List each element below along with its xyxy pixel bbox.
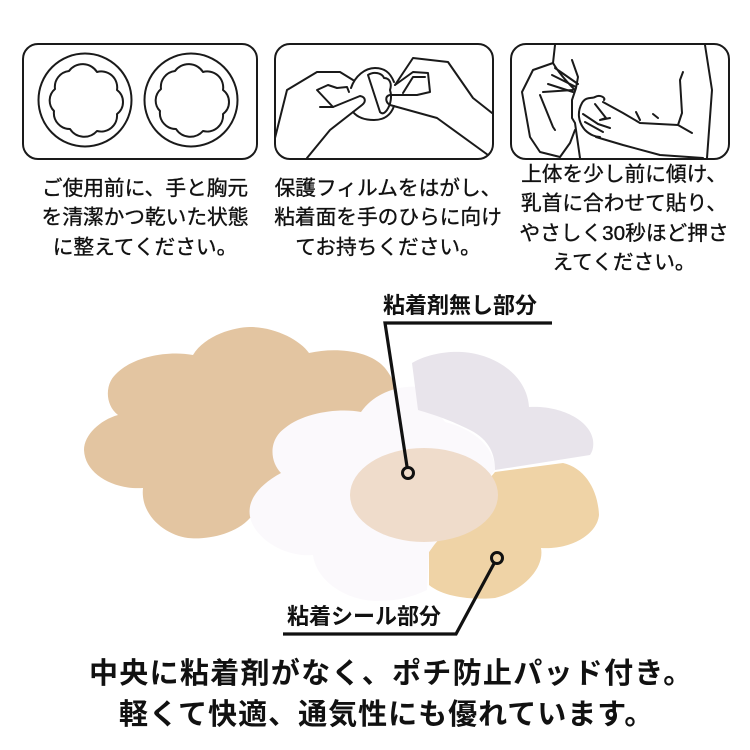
label: adhesive seal part: 粘着シール部分	[287, 604, 441, 629]
panel: peel film icon	[275, 44, 493, 159]
title line 2: 軽くて快適、通気性にも優れています。	[119, 699, 654, 731]
product: peeled film	[412, 352, 593, 470]
caption: step 2: 保護フィルムをはがし、	[275, 177, 501, 200]
caption: step 3	[519, 163, 729, 274]
callout line: adhesive seal	[283, 552, 502, 634]
product: beige patch	[84, 327, 396, 538]
caption: step 1	[42, 177, 248, 259]
caption: step 3: やさしく30秒ほど押さ	[519, 222, 729, 245]
callout line: no adhesive	[385, 323, 552, 478]
caption: step 2: てお持ちください。	[295, 236, 481, 259]
caption: step 2: 粘着面を手のひらに向け	[274, 206, 502, 229]
label: no adhesive part: 粘着剤無し部分	[383, 293, 537, 318]
product: central non-adhesive oval	[350, 448, 498, 542]
product: adhesive underside	[429, 463, 599, 599]
caption: step 1: に整えてください。	[53, 236, 237, 259]
caption: step 3: 乳首に合わせて貼り、	[521, 192, 727, 215]
caption: step 3: 上体を少し前に傾け、	[521, 163, 727, 186]
caption: step 1: ご使用前に、手と胸元	[42, 177, 248, 200]
caption: step 2	[274, 177, 502, 259]
step illustrations	[22, 43, 730, 160]
title line 1: 中央に粘着剤がなく、ポチ防止パッド付き。	[89, 658, 694, 690]
product: white backing	[250, 387, 495, 601]
panel: apply to chest icon	[511, 44, 729, 159]
panel: clean skin icon	[23, 44, 257, 159]
caption: step 3: えてください。	[552, 251, 696, 274]
caption: step 1: を清潔かつ乾いた状態	[42, 206, 248, 229]
